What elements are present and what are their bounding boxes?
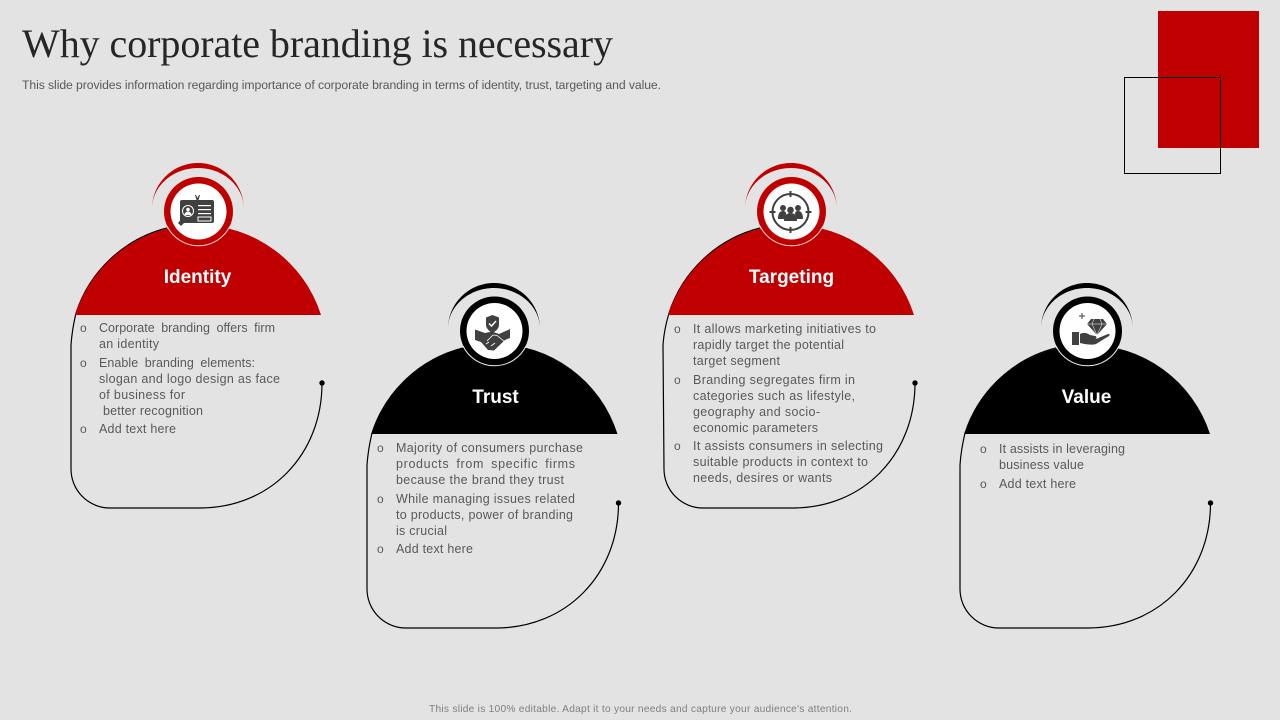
value icon ring	[1053, 296, 1122, 366]
targeting heading: Targeting	[749, 267, 834, 288]
identity bullets: an identity	[99, 337, 160, 351]
trust dot	[616, 500, 621, 506]
value bullets: Add text here	[999, 477, 1076, 491]
targeting outline	[663, 228, 915, 508]
targeting bullets: Branding segregates firm in	[693, 373, 855, 387]
identity icon ring	[164, 177, 233, 246]
targeting bullets: target segment	[693, 354, 781, 368]
targeting bullets: suitable products in context to	[693, 455, 868, 469]
trust bullets: o	[377, 542, 384, 556]
targeting bullets: categories such as lifestyle,	[693, 389, 855, 403]
targeting crescent	[745, 163, 837, 209]
identity bullets: o	[80, 321, 87, 335]
value bullets: o	[980, 442, 987, 456]
trust bullets	[377, 441, 583, 556]
identity bullets: Add text here	[99, 422, 176, 436]
trust bullets: to products, power of branding	[396, 508, 573, 522]
value bullets: business value	[999, 458, 1084, 472]
trust crescent	[448, 283, 540, 329]
panel: trust	[367, 283, 621, 628]
trust icon ring	[460, 296, 529, 366]
targeting bullets: o	[674, 373, 681, 387]
targeting dot	[912, 380, 918, 386]
footer note: This slide is 100% editable. Adapt it to your needs and capture your audience's attention.	[429, 704, 852, 715]
targeting bullets: rapidly target the potential	[693, 338, 844, 352]
identity dome	[75, 225, 321, 315]
identity bullets: Corporate branding offers firm	[99, 321, 275, 335]
panel: targeting	[663, 163, 918, 508]
targeting bullets	[674, 322, 883, 485]
targeting dome	[668, 225, 914, 315]
trust bullets: o	[377, 441, 384, 455]
targeting bullets: economic parameters	[693, 421, 818, 435]
trust bullets: Add text here	[396, 542, 473, 556]
trust bullets: Majority of consumers purchase	[396, 441, 583, 455]
identity bullets: o	[80, 356, 87, 370]
icon: target audience	[770, 191, 812, 233]
trust dome	[372, 344, 618, 434]
identity bullets: o	[80, 422, 87, 436]
identity outline	[71, 228, 322, 508]
targeting bullets: o	[674, 322, 681, 336]
icon: hand with diamond	[1072, 313, 1110, 345]
subtitle: This slide provides information regarding importance of corporate branding in terms of identity, trust, targeting and value.	[22, 78, 661, 92]
identity heading: Identity	[164, 267, 232, 288]
identity bullets: slogan and logo design as face	[99, 372, 280, 386]
trust outline	[367, 348, 618, 628]
panel: value	[960, 283, 1213, 628]
value dome	[964, 345, 1210, 434]
identity crescent	[152, 163, 244, 209]
value crescent	[1041, 283, 1133, 329]
targeting icon ring	[757, 177, 826, 246]
trust bullets: While managing issues related	[396, 492, 575, 506]
identity bullets	[80, 321, 280, 436]
value bullets	[980, 442, 1125, 491]
identity bullets: of business for	[99, 388, 185, 402]
identity bullets: better recognition	[103, 404, 203, 418]
targeting bullets: It allows marketing initiatives to	[693, 322, 876, 336]
identity dot	[319, 380, 325, 386]
value outline	[960, 348, 1210, 628]
value dot	[1208, 500, 1213, 506]
trust heading: Trust	[472, 387, 519, 408]
value bullets: o	[980, 477, 987, 491]
targeting bullets: o	[674, 439, 681, 453]
trust bullets: products from specific firms	[396, 457, 575, 471]
value heading: Value	[1062, 387, 1111, 408]
trust bullets: is crucial	[396, 524, 447, 538]
panel: identity	[71, 163, 325, 508]
trust bullets: o	[377, 492, 384, 506]
value bullets: It assists in leveraging	[999, 442, 1125, 456]
targeting bullets: needs, desires or wants	[693, 471, 832, 485]
decorative corner: red rectangle and outlined square	[1124, 11, 1259, 174]
identity bullets: Enable branding elements:	[99, 356, 255, 370]
targeting bullets: It assists consumers in selecting	[693, 439, 883, 453]
icon: id card	[178, 195, 214, 226]
targeting bullets: geography and socio-	[693, 405, 820, 419]
icon: shield and handshake	[475, 315, 510, 350]
trust bullets: because the brand they trust	[396, 473, 565, 487]
title: Why corporate branding is necessary	[22, 21, 613, 66]
